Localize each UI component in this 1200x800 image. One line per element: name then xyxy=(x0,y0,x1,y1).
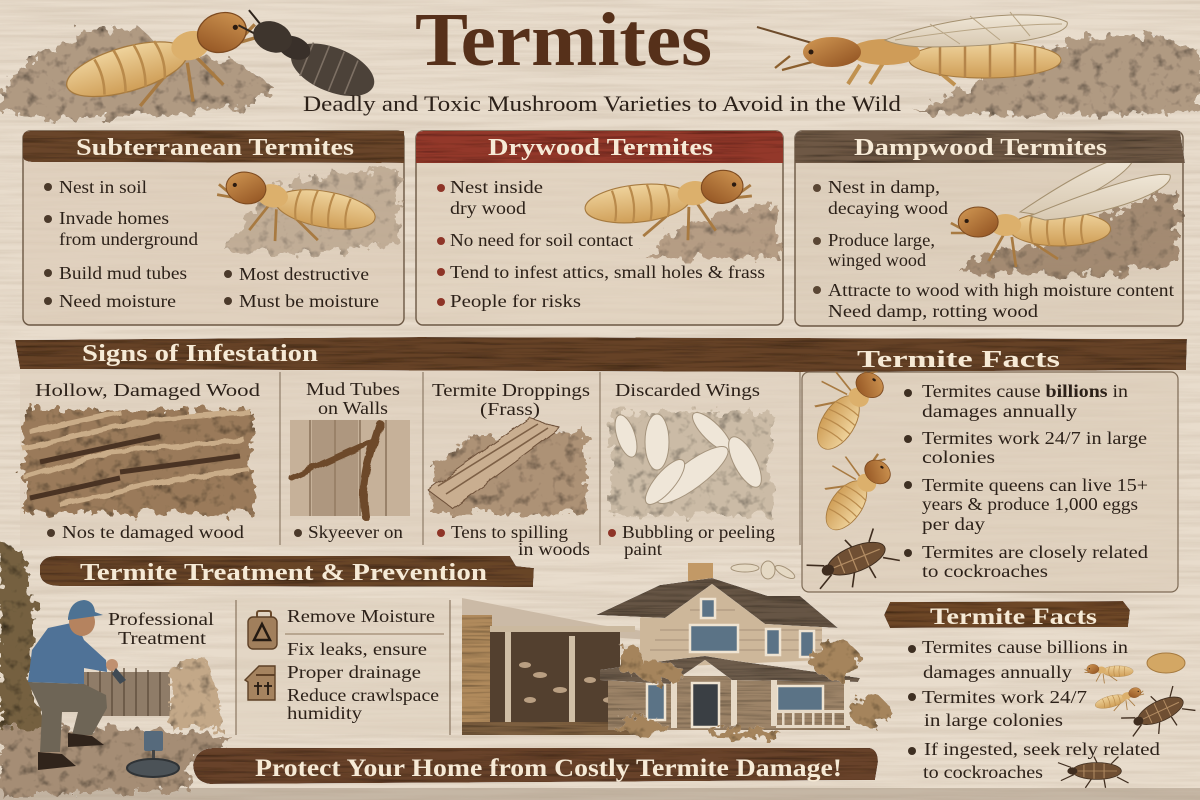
house: damaged porch xyxy=(462,598,650,735)
list: termite facts lower: to cockroaches xyxy=(923,762,1043,782)
house: upper roof xyxy=(596,578,838,628)
panel: drywood termites xyxy=(416,131,783,325)
banner: signs and facts wood: Termite Facts xyxy=(857,347,1060,373)
bullets: subterranean: Build mud tubes xyxy=(59,263,187,283)
facts list: Termites cause billions in xyxy=(922,381,1128,401)
banner: protect your home xyxy=(193,748,878,784)
image: termite droppings frass xyxy=(428,418,586,514)
panel: dampwood termites xyxy=(795,131,1185,326)
panel: termite facts xyxy=(792,349,1178,600)
facts list: years & produce 1,000 eggs xyxy=(922,494,1138,514)
prevention list: Reduce crawlspace xyxy=(287,685,439,705)
list: termite facts lower: in large colonies xyxy=(924,710,1063,730)
list: termite facts lower: Termites work 24/7 xyxy=(922,687,1087,707)
headings: signs columns: Mud Tubes xyxy=(306,379,400,399)
image: mud tubes on walls xyxy=(290,420,410,516)
headings: signs columns: Hollow, Damaged Wood xyxy=(35,380,260,400)
headings: signs columns: Discarded Wings xyxy=(615,380,760,400)
icon: dampwood winged termite xyxy=(951,157,1170,267)
facts list: Termite queens can live 15+ xyxy=(922,475,1148,495)
list: termite facts lower: If ingested, seek rely related xyxy=(924,739,1160,759)
headings: signs columns: Termite Droppings xyxy=(432,380,590,400)
banner: protect your home: Protect Your Home from Costly Termite Damage! xyxy=(255,755,842,782)
panel: subterranean termites xyxy=(23,131,404,325)
prevention list: humidity xyxy=(287,703,362,723)
label: professional treatment xyxy=(108,609,214,648)
title: Termites xyxy=(415,0,712,82)
bullets: subterranean: Need moisture xyxy=(59,291,176,311)
bullets: dampwood: Attracte to wood with high moisture content xyxy=(828,280,1174,300)
captions: signs columns: Nos te damaged wood xyxy=(62,522,244,542)
banner: signs and facts wood: Signs of Infestation xyxy=(82,341,318,367)
captions: signs columns xyxy=(47,522,775,559)
house: lower roof xyxy=(600,656,860,684)
bullets: drywood: People for risks xyxy=(450,291,581,311)
captions: signs columns: in woods xyxy=(518,539,590,559)
panel: signs of infestation xyxy=(20,368,800,559)
bullets: dampwood: decaying wood xyxy=(828,198,948,218)
banner: termite facts small: Termite Facts xyxy=(930,604,1097,629)
captions: signs columns: Bubbling or peeling xyxy=(622,522,775,542)
icon: cockroach xyxy=(803,524,902,600)
header: subterranean: Subterranean Termites xyxy=(76,135,354,161)
image: hollow damaged wood xyxy=(22,410,252,514)
bullets: dampwood: Produce large, xyxy=(828,230,935,250)
prevention list xyxy=(287,606,439,723)
illustration: winged termite and soil top right xyxy=(757,12,1200,116)
image: discarded wings xyxy=(611,407,771,515)
banner: termite treatment and prevention xyxy=(40,556,534,587)
illustration: soil and termites top left xyxy=(0,4,382,134)
bullets: subterranean: from underground xyxy=(59,229,198,249)
bullets: drywood: No need for soil contact xyxy=(450,230,633,250)
facts list: Termites work 24/7 in large xyxy=(922,428,1147,448)
list: termite facts lower: damages annually xyxy=(923,662,1072,682)
facts list: to cockroaches xyxy=(922,561,1048,581)
facts list xyxy=(904,381,1148,581)
house: chimney xyxy=(688,563,713,585)
bullets: subterranean xyxy=(44,177,379,311)
bullets: subterranean: Nest in soil xyxy=(59,177,147,197)
house: upper walls xyxy=(640,582,822,668)
captions: signs columns: Tens to spilling xyxy=(451,522,568,542)
header: drywood xyxy=(416,131,783,163)
icon: termite 1 xyxy=(792,349,890,459)
illustration: outdoor scene and technician xyxy=(0,540,230,796)
list: termite facts lower: Termites cause billions in xyxy=(922,637,1128,657)
prevention list: Proper drainage xyxy=(287,662,421,682)
headings: signs columns xyxy=(35,379,760,420)
headings: signs columns: (Frass) xyxy=(480,399,540,420)
figure: technician xyxy=(28,600,126,770)
icon: subterranean termite xyxy=(211,168,379,257)
icon: moisture canister xyxy=(248,611,277,649)
house: porch posts and rail xyxy=(671,680,850,728)
illustration: scattered wings xyxy=(731,561,797,581)
banner: termite treatment and prevention: Termite Treatment & Prevention xyxy=(80,560,487,586)
banner: signs and facts wood xyxy=(15,337,1187,373)
bullets: drywood xyxy=(437,177,765,311)
illustration: damaged house xyxy=(462,563,890,738)
bullets: dampwood xyxy=(813,177,1174,321)
list: termite facts lower xyxy=(908,637,1160,782)
icon: termite 2 xyxy=(802,436,897,540)
bullets: subterranean: Must be moisture xyxy=(239,291,379,311)
header: dampwood xyxy=(795,131,1185,163)
icon: drywood termite xyxy=(583,167,756,251)
header: drywood: Drywood Termites xyxy=(488,135,713,161)
bullets: dampwood: Nest in damp, xyxy=(828,177,940,197)
captions: signs columns: Skyeever on xyxy=(308,522,403,542)
house: overgrown shrubs xyxy=(612,640,890,738)
label: professional treatment: Professional xyxy=(108,609,214,629)
facts list: colonies xyxy=(922,447,995,467)
icon: house with arrows xyxy=(245,666,275,700)
bullets: subterranean: Invade homes xyxy=(59,208,169,228)
prevention list: Fix leaks, ensure xyxy=(287,639,427,659)
bullets: drywood: dry wood xyxy=(450,198,526,218)
label: professional treatment: Treatment xyxy=(118,628,206,648)
bullets: drywood: Tend to infest attics, small holes & frass xyxy=(450,262,765,282)
bullets: dampwood: Need damp, rotting wood xyxy=(828,301,1038,321)
prevention list: Remove Moisture xyxy=(287,606,435,626)
facts list: per day xyxy=(922,514,985,534)
panel: prevention xyxy=(236,598,450,735)
facts list: damages annually xyxy=(922,401,1077,421)
facts list: Termites are closely related xyxy=(922,542,1148,562)
header: dampwood: Dampwood Termites xyxy=(854,135,1107,161)
subtitle: Deadly and Toxic Mushroom Varieties to Avoid in the Wild xyxy=(303,91,901,116)
icons: small insects lower right xyxy=(1058,653,1198,788)
bullets: dampwood: winged wood xyxy=(828,250,926,270)
headings: signs columns: on Walls xyxy=(318,398,388,418)
banner: termite facts small xyxy=(884,601,1130,629)
header: subterranean xyxy=(23,131,404,163)
figure: bait station xyxy=(127,731,179,777)
house: windows xyxy=(647,599,823,727)
house: lower walls xyxy=(608,676,850,730)
captions: signs columns: paint xyxy=(624,539,662,559)
bullets: subterranean: Most destructive xyxy=(239,264,369,284)
bullets: drywood: Nest inside xyxy=(450,177,543,197)
